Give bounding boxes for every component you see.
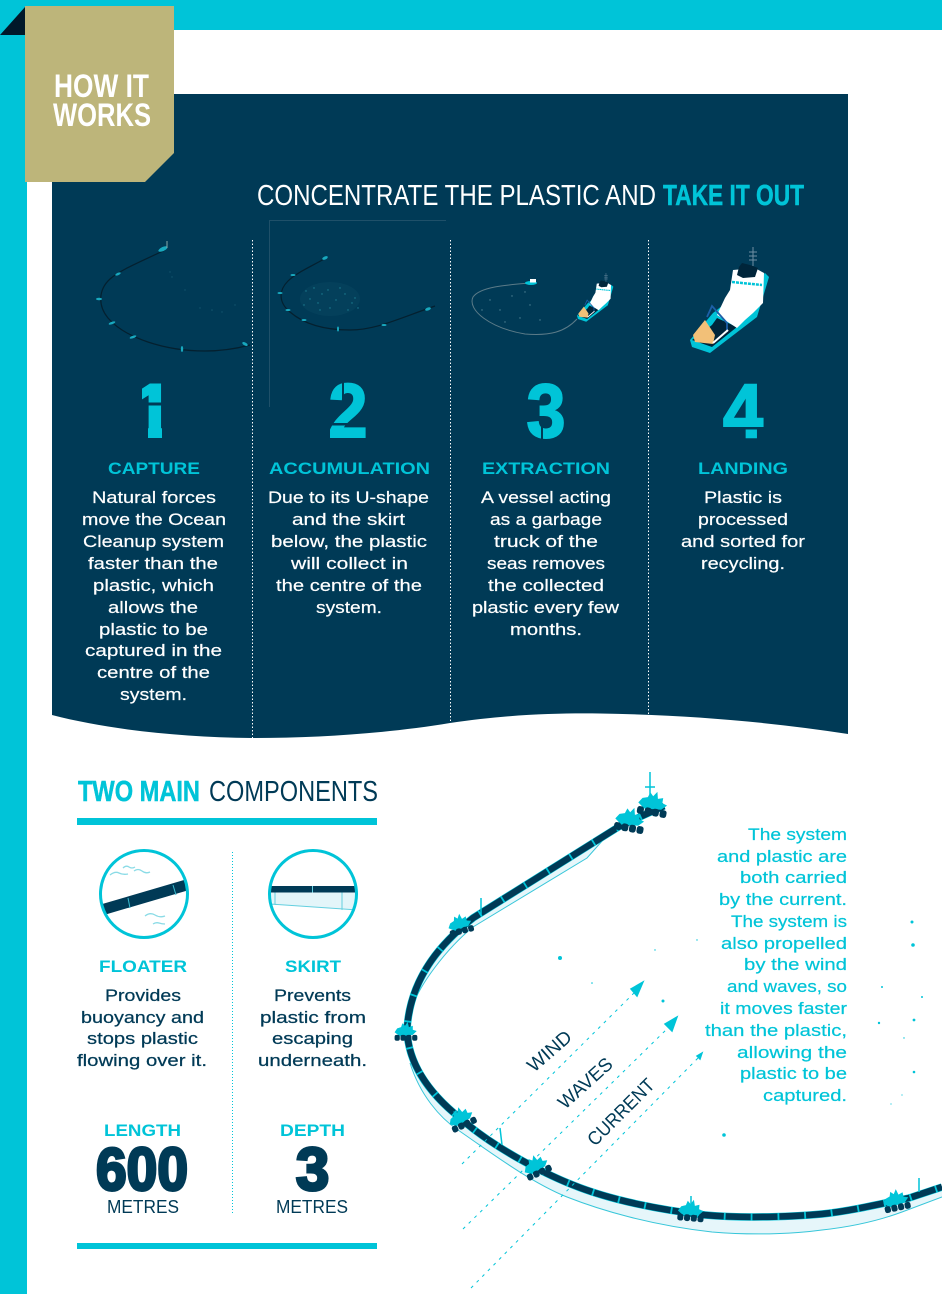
label: ACCUMULATION — [269, 459, 430, 478]
explanation text: than the plastic, — [705, 1021, 847, 1040]
description: plastic to be — [99, 620, 208, 639]
skirt label: SKIRT — [285, 957, 342, 976]
description: plastic, which — [93, 576, 214, 595]
description — [82, 488, 226, 704]
explanation text — [705, 825, 847, 1105]
description — [268, 488, 429, 617]
fold shadow triangle — [0, 7, 25, 35]
illustration: accumulation — [278, 255, 435, 332]
explanation text: The system — [748, 825, 847, 844]
floater outline — [407, 806, 942, 1217]
floater description: buoyancy and — [81, 1008, 204, 1027]
label: waves: WAVES — [554, 1054, 617, 1114]
number 1: 1 — [132, 369, 174, 454]
floater description: stops plastic — [87, 1029, 199, 1048]
skirt — [407, 826, 942, 1234]
dotted divider — [232, 852, 234, 1214]
description: system. — [120, 685, 187, 704]
skirt edge — [410, 840, 942, 1234]
arrow: current — [471, 1053, 702, 1288]
floater description: Provides — [105, 986, 181, 1005]
floater length stat — [96, 1121, 188, 1217]
explanation text: also propelled — [721, 934, 847, 953]
description: move the Ocean — [82, 510, 226, 529]
label: CAPTURE — [108, 459, 200, 478]
floater length stat: 600 — [96, 1136, 188, 1203]
explanation text: both carried — [740, 868, 847, 887]
dotted dividers — [252, 240, 648, 738]
badge: how it works: HOW IT — [54, 68, 149, 104]
panel: how it works — [52, 94, 848, 738]
description: months. — [510, 620, 582, 639]
explanation text: it moves faster — [720, 999, 847, 1018]
description: Due to its U-shape — [268, 488, 429, 507]
description: truck of the — [494, 532, 598, 551]
description: faster than the — [88, 554, 218, 573]
description — [681, 488, 805, 573]
explanation text: by the current. — [719, 890, 847, 909]
floater segments — [407, 806, 942, 1217]
heading — [78, 776, 378, 808]
panel heading: CONCENTRATE THE PLASTIC AND — [257, 180, 656, 212]
explanation text: allowing the — [737, 1043, 847, 1062]
left cyan band — [0, 0, 27, 1294]
description: recycling. — [701, 554, 785, 573]
description: allows the — [108, 598, 198, 617]
panel background — [52, 94, 848, 738]
description: will collect in — [290, 554, 408, 573]
description — [472, 488, 620, 639]
top cyan band — [0, 0, 942, 30]
illustration: vessel extraction — [472, 273, 613, 334]
explanation text: by the wind — [744, 955, 847, 974]
description: Cleanup system — [83, 532, 224, 551]
skirt description: Prevents — [274, 986, 351, 1005]
label: current: CURRENT — [584, 1075, 660, 1151]
skirt depth stat: 3 — [296, 1136, 329, 1203]
skirt depth stat: DEPTH — [280, 1121, 345, 1140]
description: processed — [698, 510, 788, 529]
icon: skirt — [268, 850, 358, 938]
explanation text: captured. — [763, 1086, 847, 1105]
explanation text: and plastic are — [717, 847, 847, 866]
label: LANDING — [698, 459, 788, 478]
description: Plastic is — [704, 488, 782, 507]
description: centre of the — [97, 663, 210, 682]
explanation text: The system is — [731, 912, 847, 931]
badge: how it works: WORKS — [53, 97, 151, 133]
number 3: 3 — [526, 369, 566, 454]
illustration: system capture — [96, 241, 250, 352]
section: two main components — [77, 776, 378, 1249]
description: and the skirt — [292, 510, 405, 529]
explanation text: plastic to be — [740, 1064, 847, 1083]
masts — [481, 772, 919, 1207]
step 1: capture — [82, 241, 250, 704]
number 4: 4 — [723, 369, 763, 454]
floater length stat: METRES — [107, 1197, 179, 1217]
description: as a garbage — [490, 510, 602, 529]
skirt description: underneath. — [258, 1051, 367, 1070]
explanation text: and waves, so — [727, 977, 847, 996]
step 4: landing — [681, 247, 805, 573]
skirt description — [258, 986, 367, 1070]
floater description: flowing over it. — [77, 1051, 207, 1070]
description: captured in the — [85, 641, 222, 660]
faint frame — [270, 220, 446, 407]
description: seas removes — [487, 554, 605, 573]
label: wind: WIND — [524, 1027, 577, 1077]
description: Natural forces — [92, 488, 216, 507]
panel heading: TAKE IT OUT — [663, 180, 804, 212]
floater description — [77, 986, 207, 1070]
step 3: extraction — [472, 273, 620, 639]
skirt description: escaping — [272, 1029, 353, 1048]
skirt depth stat — [276, 1121, 348, 1217]
description: plastic every few — [472, 598, 620, 617]
heading: TWO MAIN — [78, 776, 200, 808]
description: and sorted for — [681, 532, 805, 551]
diagram: system in the current — [395, 772, 942, 1288]
skirt depth stat: METRES — [276, 1197, 348, 1217]
icon: floater — [98, 850, 190, 938]
floater length stat: LENGTH — [104, 1121, 181, 1140]
label: EXTRACTION — [482, 459, 610, 478]
top rule — [77, 818, 377, 825]
description: below, the plastic — [271, 532, 428, 551]
description: the collected — [488, 576, 604, 595]
skirt description: plastic from — [260, 1008, 366, 1027]
floats — [395, 789, 911, 1222]
badge: how it works — [25, 6, 174, 182]
plastic debris — [558, 920, 923, 1137]
arrow: waves — [463, 1017, 677, 1229]
description: system. — [316, 598, 382, 617]
description: A vessel acting — [481, 488, 611, 507]
description: the centre of the — [276, 576, 422, 595]
step 2: accumulation — [268, 255, 435, 617]
illustration: vessel with plastic — [690, 247, 769, 353]
arrow: wind — [462, 982, 643, 1164]
number 2: 2 — [328, 369, 368, 454]
bottom rule — [77, 1243, 377, 1249]
floater label: FLOATER — [99, 957, 187, 976]
heading: COMPONENTS — [209, 776, 378, 808]
